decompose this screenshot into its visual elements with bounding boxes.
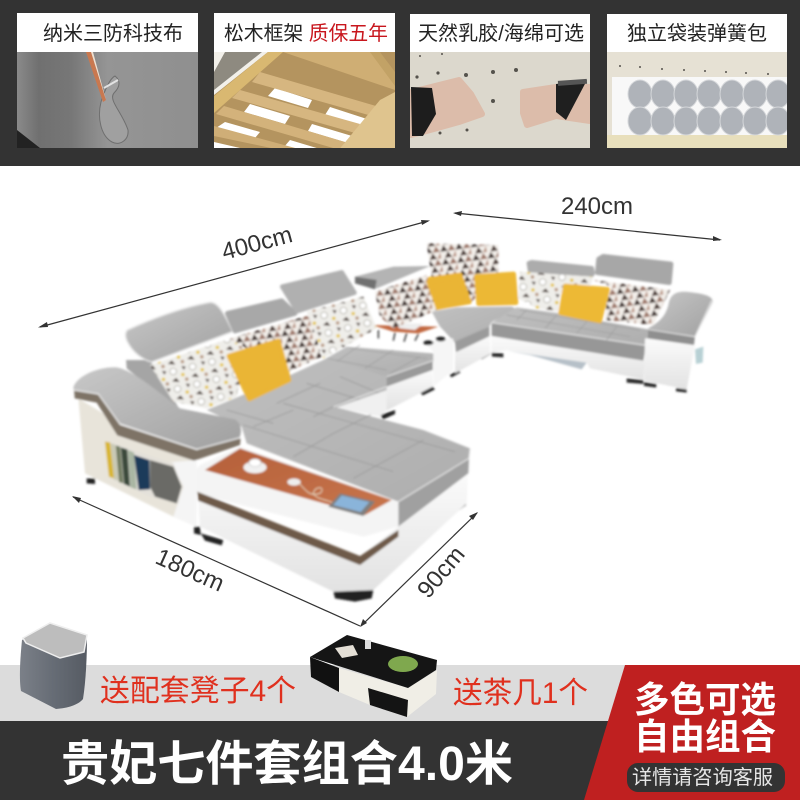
chaise side xyxy=(398,458,469,527)
brown band xyxy=(197,492,398,565)
back behind arm xyxy=(126,360,180,410)
product title: 贵妃七件套组合4.0米 xyxy=(61,738,513,791)
outer headrest xyxy=(597,256,671,283)
armrest band xyxy=(74,389,241,461)
dimension: 400cm: 400cm xyxy=(219,221,295,266)
red badge xyxy=(584,665,800,800)
floral pillow 1 xyxy=(150,338,247,408)
books xyxy=(105,442,150,490)
seat base under middle xyxy=(337,390,387,417)
far triangle pillow xyxy=(427,243,498,303)
sofa: right wing xyxy=(420,243,713,395)
photo: spring pockets xyxy=(607,52,790,148)
heading: latex or foam: 天然乳胶/海绵可选 xyxy=(418,22,584,45)
yellow pillow back xyxy=(429,277,468,308)
wood tray xyxy=(205,448,392,515)
customer service pill: 详情请咨询客服 xyxy=(632,766,773,789)
bottom title band xyxy=(0,721,620,800)
under-seat strip xyxy=(507,351,587,369)
headrest 1 xyxy=(126,302,233,362)
inner headrest xyxy=(529,262,593,275)
main seat xyxy=(207,358,470,502)
woven basket xyxy=(150,460,182,503)
sofa: left wing xyxy=(73,266,470,602)
right arm fabric xyxy=(648,292,713,337)
top dark band xyxy=(0,0,800,166)
badge line 2: 自由组合 xyxy=(634,716,776,757)
armrest fabric xyxy=(73,367,241,450)
photo: fabric with water drop xyxy=(17,52,198,148)
corner seat front xyxy=(455,327,489,353)
cup and saucer xyxy=(243,459,267,473)
shelf opening xyxy=(105,440,182,503)
tablet xyxy=(328,493,375,516)
headrest 4 xyxy=(355,266,430,288)
badge line 1: 多色可选 xyxy=(634,679,776,720)
heading: fabric: 纳米三防科技布 xyxy=(43,22,183,45)
corner seat base xyxy=(455,336,490,373)
triangle pillow 3 xyxy=(375,275,437,328)
dimension: 400cm xyxy=(38,220,430,328)
dimension: 240cm xyxy=(453,193,722,241)
photo: hands pressing latex xyxy=(410,52,590,148)
panel: nano fabric xyxy=(17,13,198,148)
icon: coffee table xyxy=(310,635,437,717)
dimension: 90cm: 90cm xyxy=(412,541,471,603)
floral pillow 2 xyxy=(307,297,377,358)
yellow pillow left xyxy=(229,341,289,399)
armrest body with shelf xyxy=(78,398,197,527)
icon: stool xyxy=(20,623,87,709)
long seat front xyxy=(492,322,646,361)
dimension: 180cm xyxy=(72,496,360,626)
dimension: 180cm: 180cm xyxy=(151,543,228,597)
feet right wing xyxy=(420,352,687,395)
chaise front base xyxy=(198,473,468,592)
corner seat xyxy=(432,307,518,343)
right arm box xyxy=(644,338,695,389)
dimension: 90cm xyxy=(360,512,478,627)
yellow pillow 3 xyxy=(561,286,608,321)
long seat top xyxy=(492,307,648,346)
right arm band xyxy=(647,328,695,345)
panel: pine frame xyxy=(214,13,395,152)
triangle pillow right xyxy=(593,280,670,325)
yellow pillow 2 xyxy=(476,274,516,304)
long seat base xyxy=(491,336,645,379)
photo: wooden slats xyxy=(214,52,395,152)
side pocket xyxy=(695,347,703,364)
headrest 3 xyxy=(282,272,354,311)
heading: frame with warranty: 松木框架 质保五年 xyxy=(224,22,388,45)
yellow pillow 1 xyxy=(429,275,469,308)
table top white xyxy=(195,447,398,537)
floral pillow right xyxy=(518,272,593,312)
gift text: stools: 送配套凳子4个 xyxy=(100,675,296,708)
gift band xyxy=(0,665,640,721)
customer service pill xyxy=(627,763,785,792)
dimension: 240cm: 240cm xyxy=(561,193,633,220)
second seat xyxy=(323,347,433,377)
heading: springs: 独立袋装弹簧包 xyxy=(627,22,767,45)
headrest 2 xyxy=(227,301,295,331)
feet left wing xyxy=(87,387,466,602)
console xyxy=(423,338,453,387)
charger and cable xyxy=(287,478,333,503)
sofa illustration xyxy=(73,243,713,602)
side table xyxy=(372,323,438,342)
gift text: coffee table: 送茶几1个 xyxy=(453,677,588,710)
panel: pocket springs xyxy=(607,14,790,148)
triangle pillow 2 xyxy=(230,315,322,372)
panel: latex xyxy=(410,14,590,148)
